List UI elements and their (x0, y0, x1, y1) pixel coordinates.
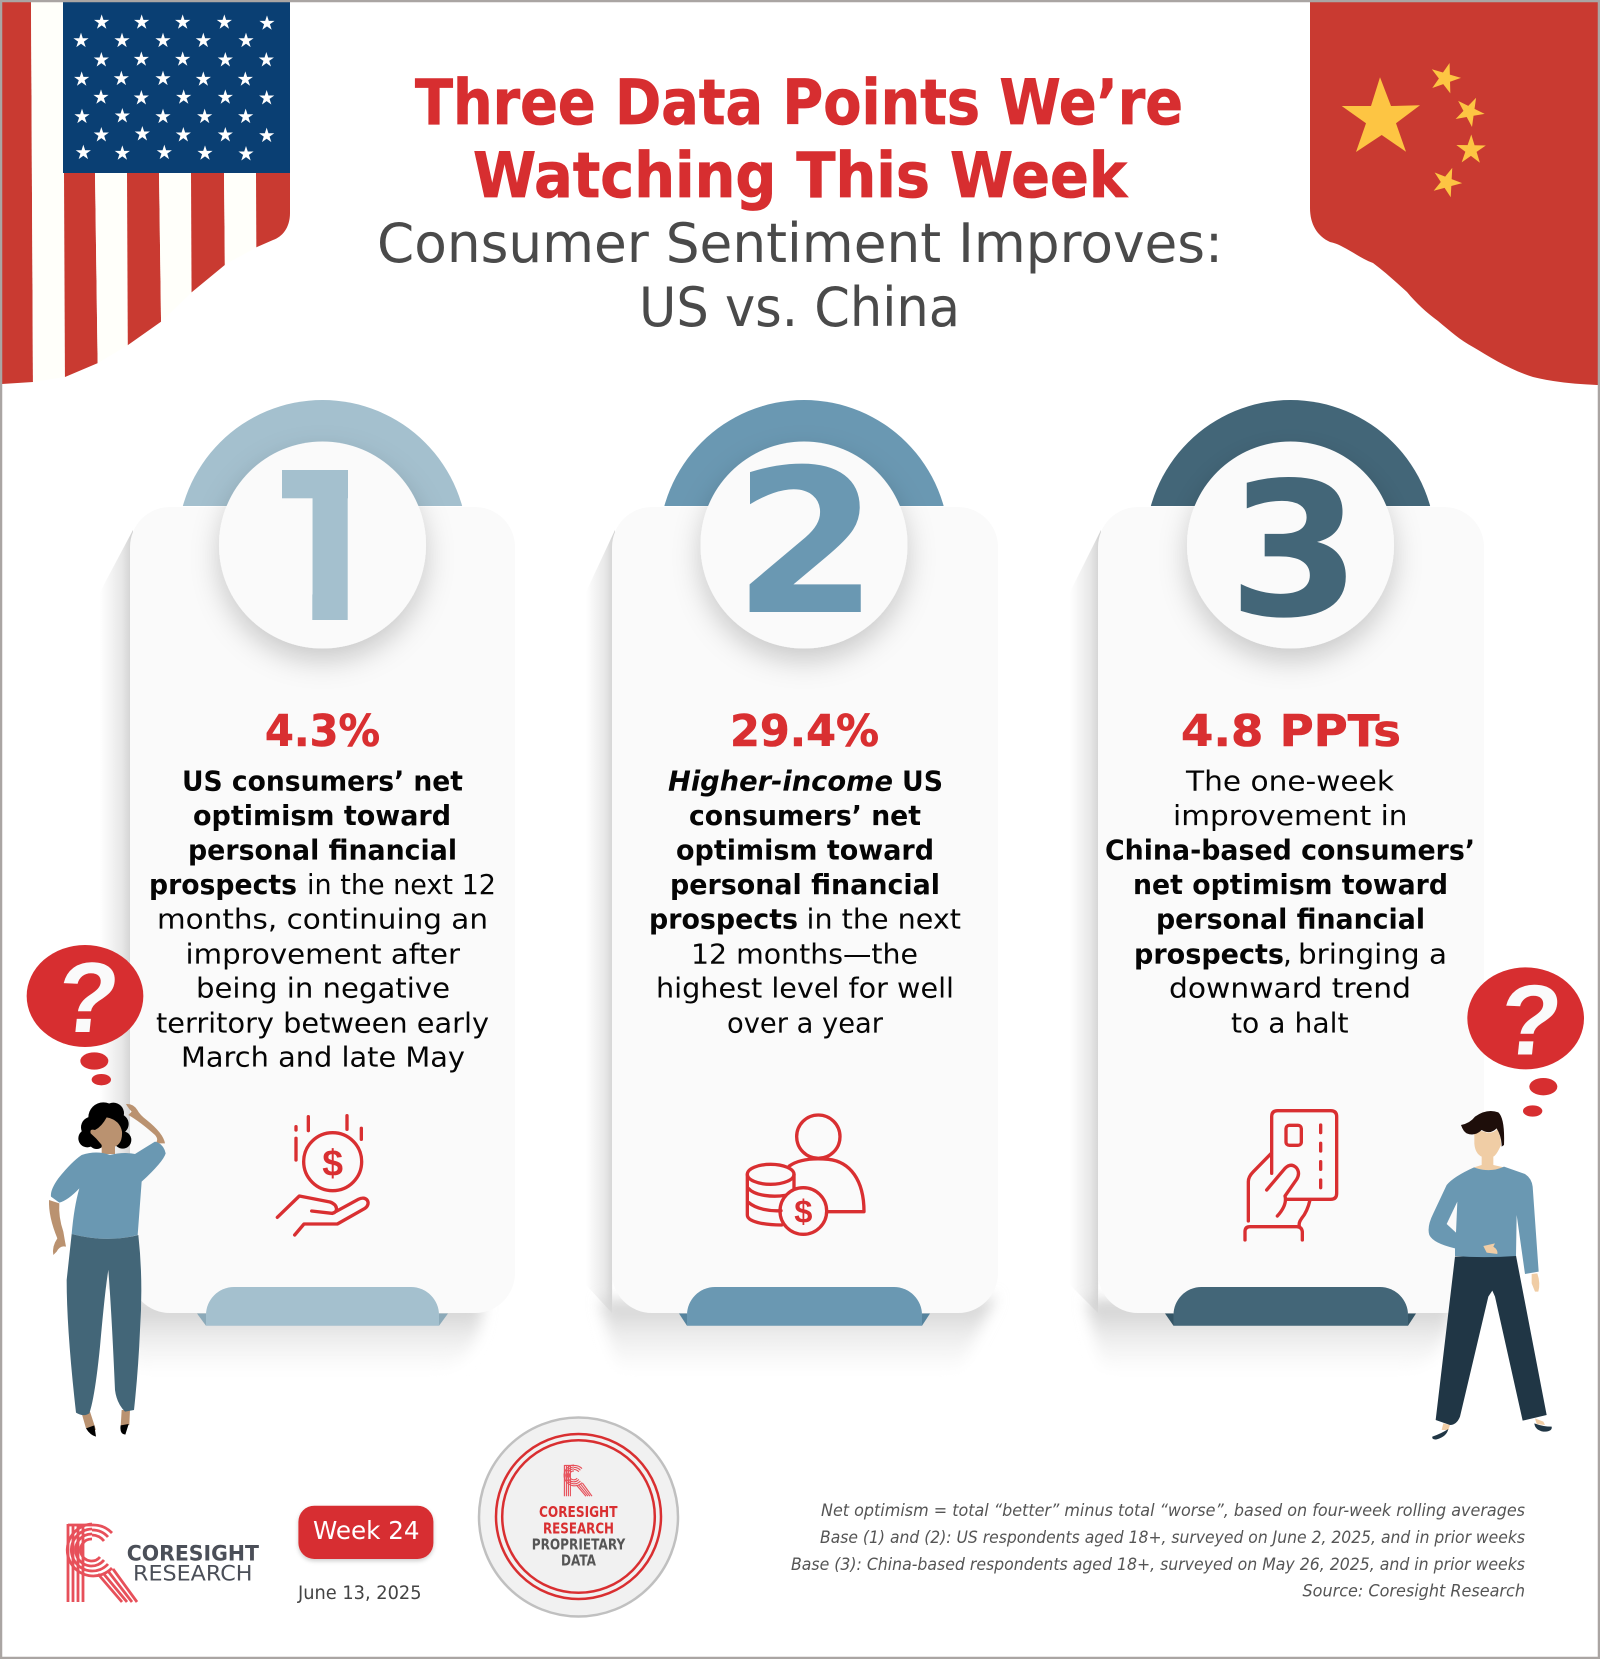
description text: March and late May (181, 1041, 465, 1074)
description text (649, 765, 961, 1039)
flag: United States (2, 0, 290, 390)
description text: prospects (149, 868, 297, 901)
figure (49, 1102, 166, 1437)
seal: proprietary data: RESEARCH (543, 1519, 614, 1537)
description text (1105, 765, 1475, 1039)
description text: net optimism toward (1133, 868, 1448, 901)
icon: coin falling into hand: $ (322, 1141, 343, 1183)
icon: person with coins (747, 1115, 864, 1234)
logo: Coresight Research: RESEARCH (133, 1562, 252, 1586)
number 3: 3 (1228, 442, 1361, 659)
statistic 29.4%: 29.4% (730, 706, 879, 757)
description text: optimism toward (193, 799, 451, 832)
description text: China-based consumers’ (1105, 834, 1475, 866)
panel: card 1 (100, 400, 515, 1372)
description text: downward trend (1169, 972, 1411, 1005)
badge: Week 24: Week 24 (313, 1516, 420, 1545)
question mark: ? (52, 942, 125, 1054)
icon: coin falling into hand (277, 1116, 368, 1235)
description text: US consumers’ net (182, 765, 463, 798)
description text: The one-week (1185, 765, 1395, 798)
statistic 4.8 PPTs: 4.8 PPTs (1181, 706, 1401, 757)
logo: Coresight Research (67, 1524, 260, 1602)
subtitle (377, 212, 1223, 339)
footnotes: Source: Coresight Research (1302, 1582, 1525, 1602)
description text: personal financial (188, 834, 457, 866)
footnotes: Base (3): China-based respondents aged 18+, surveyed on May 26, 2025, and in prior weeks (791, 1555, 1525, 1575)
description text: personal financial (670, 868, 940, 901)
badge: Week 24 (298, 1506, 433, 1559)
number 1: 1 (252, 425, 400, 672)
logo: Coresight Research: CORESIGHT (127, 1542, 260, 1566)
thought bubble (1467, 967, 1584, 1117)
footnotes: Net optimism = total “better” minus total “worse”, based on four-week rolling averages (821, 1501, 1525, 1521)
description text: being in negative (196, 972, 450, 1005)
description text: in the next (806, 903, 961, 936)
description text (149, 765, 496, 1074)
seal: proprietary data: DATA (561, 1552, 596, 1570)
statistic 4.3%: 4.3% (265, 706, 380, 757)
description text: in the next 12 (307, 868, 496, 901)
description text: prospects (1134, 937, 1284, 970)
description text: personal financial (1156, 903, 1425, 936)
number 1 (282, 470, 348, 620)
seal: proprietary data (479, 1418, 678, 1616)
description text: 12 months—the (691, 937, 918, 970)
flag: China (1310, 2, 1598, 385)
description text: prospects (649, 903, 798, 936)
panel: card 3 (1070, 400, 1484, 1372)
description text: Higher-income (668, 765, 893, 798)
illustration: woman thinking (27, 942, 166, 1437)
title: Three Data Points We’re (415, 66, 1183, 139)
date: June 13, 2025 (297, 1582, 422, 1604)
description text: over a year (727, 1006, 883, 1039)
title: Watching This Week (473, 139, 1129, 212)
description text: bringing a (1298, 937, 1447, 970)
description text: improvement after (186, 937, 460, 970)
question mark: ? (1494, 965, 1567, 1077)
seal: proprietary data: PROPRIETARY (532, 1536, 626, 1554)
icon: person with coins: $ (794, 1193, 812, 1230)
description text: , (1283, 937, 1292, 970)
seal: proprietary data: CORESIGHT (539, 1503, 618, 1521)
footnotes (791, 1501, 1525, 1602)
description text: US (902, 765, 943, 798)
footnotes: Base (1) and (2): US respondents aged 18+, surveyed on June 2, 2025, and in prior weeks (820, 1528, 1525, 1548)
illustration: man thinking (1429, 965, 1584, 1439)
thought bubble (27, 945, 143, 1085)
figure (1429, 1111, 1552, 1439)
description text: improvement in (1173, 799, 1408, 832)
description text: to a halt (1231, 1006, 1349, 1039)
subtitle: US vs. China (639, 276, 960, 339)
subtitle: Consumer Sentiment Improves: (377, 212, 1223, 275)
description text: optimism toward (676, 834, 934, 866)
description text: territory between early (156, 1006, 489, 1039)
title (415, 66, 1183, 212)
description text: highest level for well (656, 972, 954, 1005)
icon: hand holding card (1245, 1111, 1337, 1240)
description text: consumers’ net (689, 799, 921, 832)
panel: card 2 (586, 400, 998, 1372)
description text: months, continuing an (157, 903, 488, 936)
number 2: 2 (733, 427, 879, 660)
